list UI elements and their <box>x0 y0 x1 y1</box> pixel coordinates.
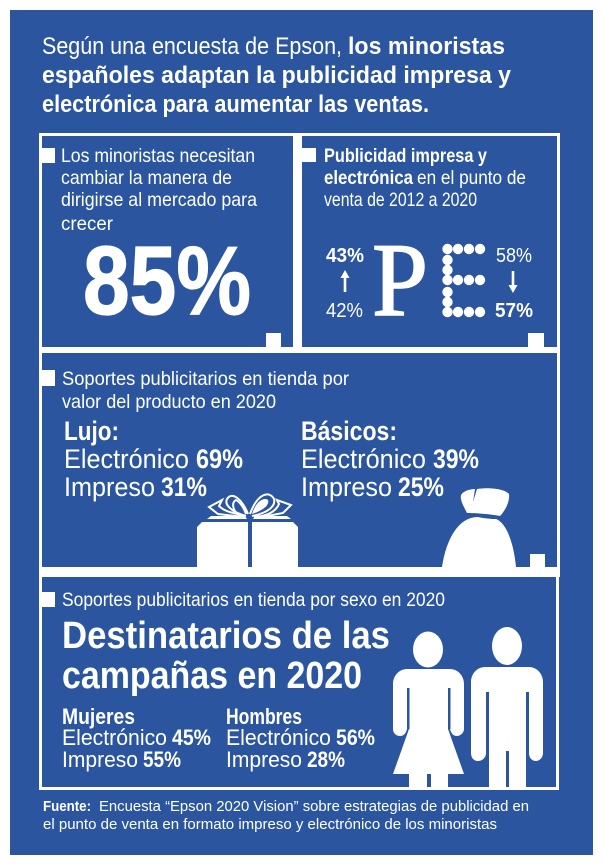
panel text: cambiar la manera de <box>61 167 232 189</box>
men figures: Electrónico <box>226 725 331 750</box>
panel text: venta de 2012 a 2020 <box>324 189 477 211</box>
icon: man <box>471 627 543 787</box>
basics figures: 39% <box>433 444 479 474</box>
men figures: 56% <box>336 725 375 750</box>
bullet square <box>42 370 55 386</box>
icon: sack <box>442 488 516 567</box>
source note: el punto de venta en formato impreso y electrónico de los minoristas <box>43 816 497 833</box>
panel heading: Soportes publicitarios en tienda por sexo en 2020 <box>62 589 445 611</box>
electronic trend figures: 58% <box>496 245 532 267</box>
corner square <box>530 554 545 567</box>
panel text: Los minoristas necesitan <box>61 145 255 167</box>
panel text: Publicidad impresa y <box>324 145 487 167</box>
panel: in-store media by product value <box>39 347 560 577</box>
luxury figures <box>64 416 243 502</box>
basics figures: 25% <box>398 472 444 502</box>
women figures: 55% <box>143 747 181 772</box>
men figures <box>226 704 375 772</box>
panel: retailers need to change <box>39 133 297 353</box>
panel text <box>324 145 526 211</box>
men figures: 28% <box>307 747 345 772</box>
electronic trend figures: 57% <box>495 300 533 322</box>
basics figures: Impreso <box>301 472 392 502</box>
men figures: Hombres <box>226 704 302 729</box>
women figures: 45% <box>172 725 211 750</box>
panel text: en el punto de <box>417 167 526 189</box>
basics figures: Básicos: <box>301 416 397 446</box>
source note: Encuesta “Epson 2020 Vision” sobre estrategias de publicidad en <box>99 798 529 815</box>
source note: Fuente: <box>43 798 91 815</box>
luxury figures: Lujo: <box>64 416 119 446</box>
icon: gift box <box>197 494 298 567</box>
corner square <box>266 333 281 347</box>
bullet square <box>42 592 55 607</box>
panel text: dirigirse al mercado para <box>61 189 257 211</box>
women figures: Electrónico <box>62 725 167 750</box>
campaign title: Destinatarios de las <box>62 615 390 657</box>
luxury figures: 69% <box>196 444 243 474</box>
header text: los minoristas <box>348 33 505 60</box>
bullet square <box>42 148 55 163</box>
header text: Según una encuesta de Epson, <box>42 33 342 60</box>
big figure 85%: 85% <box>83 226 251 335</box>
panel text: electrónica <box>324 167 413 189</box>
luxury figures: 31% <box>161 472 207 502</box>
men figures: Impreso <box>226 747 302 772</box>
letter P: P <box>372 221 428 338</box>
header text: electrónica para aumentar las ventas. <box>42 91 429 118</box>
basics figures: Electrónico <box>301 444 426 474</box>
corner square <box>528 333 544 347</box>
campaign title: campañas en 2020 <box>62 655 362 697</box>
electronic trend figures <box>495 245 533 322</box>
panel: print and electronic advertising <box>297 133 560 353</box>
print trend figures <box>326 245 364 322</box>
panel heading <box>62 368 349 413</box>
header text <box>42 33 511 118</box>
panel heading: valor del producto en 2020 <box>62 391 276 413</box>
luxury figures: Electrónico <box>64 444 189 474</box>
women figures: Mujeres <box>62 704 135 729</box>
source note <box>43 798 529 833</box>
women figures <box>62 704 211 772</box>
panel text <box>61 145 257 235</box>
panel heading: Soportes publicitarios en tienda por <box>62 368 349 390</box>
header text: españoles adaptan la publicidad impresa y <box>42 62 511 89</box>
luxury figures: Impreso <box>64 472 155 502</box>
women figures: Impreso <box>62 747 138 772</box>
icon: woman <box>393 632 464 787</box>
basics figures <box>301 416 479 502</box>
campaign title <box>62 615 390 697</box>
bullet square <box>302 148 316 162</box>
panel: in-store media by sex <box>39 577 559 790</box>
panel text: crecer <box>61 213 113 235</box>
print trend figures: 43% <box>326 245 364 267</box>
dotted letter E <box>442 244 485 317</box>
print trend figures: 42% <box>326 300 363 322</box>
